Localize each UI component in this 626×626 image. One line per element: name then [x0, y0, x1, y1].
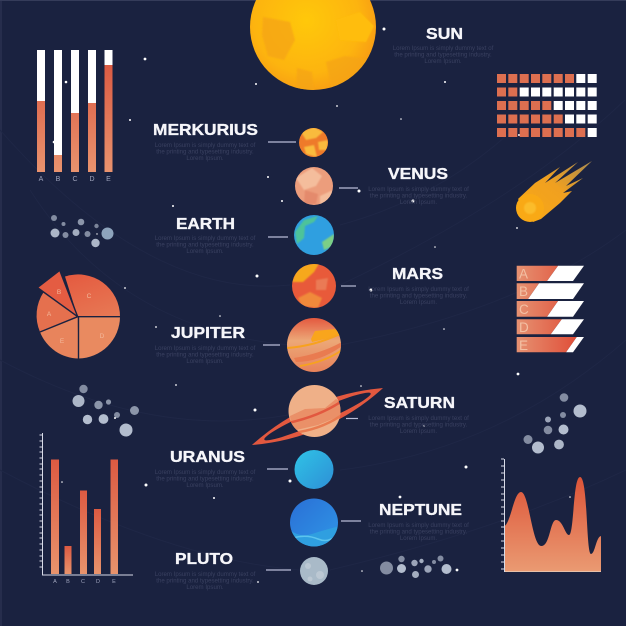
heading: merkurius: Lorem Ipsum.: [186, 155, 224, 162]
stacked bar chart: [37, 50, 112, 183]
planet: pluto: [300, 557, 328, 585]
ribbon chart: A to E: E: [519, 338, 528, 353]
ribbon chart: A to E: [517, 266, 584, 353]
heading: earth: EARTH: [176, 216, 235, 233]
heading: earth: Lorem Ipsum.: [186, 248, 224, 255]
heading: jupiter: Lorem Ipsum is simply dummy text of: [155, 345, 256, 352]
column chart: C: [81, 579, 85, 585]
waffle chart: [497, 74, 597, 137]
heading: uranus: the printing and typesetting industry.: [156, 476, 254, 482]
heading: neptune: Lorem Ipsum.: [400, 535, 437, 542]
pie chart: E: [60, 338, 65, 345]
column chart: E: [112, 579, 116, 585]
heading: mars: the printing and typesetting industry.: [370, 292, 468, 300]
heading: venus: Lorem Ipsum.: [400, 199, 437, 206]
heading: sun: Lorem Ipsum is simply dummy text of: [393, 45, 494, 52]
planet: saturn with ring: [252, 385, 383, 445]
heading: pluto: the printing and typesetting industry.: [156, 578, 254, 584]
heading: sun: Lorem Ipsum.: [424, 58, 462, 65]
stacked bar chart: C: [72, 176, 78, 183]
heading: jupiter: [155, 325, 256, 365]
heading: uranus: Lorem Ipsum is simply dummy text of: [155, 469, 256, 476]
heading: saturn: Lorem Ipsum is simply dummy text of: [368, 415, 469, 422]
planet: merkurius: [299, 127, 328, 157]
planet: sun: [250, 0, 376, 92]
heading: venus: Lorem Ipsum is simply dummy text of: [368, 186, 469, 193]
heading: earth: the printing and typesetting industry.: [156, 242, 254, 248]
heading: uranus: Lorem Ipsum.: [186, 482, 224, 489]
stars: [53, 28, 571, 583]
planet: neptune: [290, 498, 340, 548]
planet: jupiter: [287, 318, 342, 372]
heading: venus: VENUS: [388, 166, 448, 183]
heading: mars: Lorem Ipsum.: [400, 299, 437, 306]
column chart: [40, 433, 133, 585]
pie chart: B: [57, 289, 61, 296]
planet: uranus: [294, 450, 334, 489]
heading: jupiter: the printing and typesetting industry.: [156, 352, 254, 358]
pie chart: D: [100, 333, 105, 340]
ribbon chart: A to E: B: [519, 284, 528, 299]
heading: neptune: NEPTUNE: [379, 502, 462, 519]
planet: earth: [294, 215, 334, 256]
pie chart: [37, 271, 120, 358]
stacked bar chart: A: [39, 176, 44, 183]
area chart: [501, 459, 601, 572]
heading: mars: Lorem Ipsum is simply dummy text of: [368, 286, 469, 293]
stacked bar chart: B: [56, 176, 61, 183]
heading: merkurius: Lorem Ipsum is simply dummy text of: [155, 142, 256, 149]
heading: venus: the printing and typesetting industry.: [370, 192, 468, 200]
heading: saturn: the printing and typesetting industry.: [370, 422, 468, 428]
heading: sun: the printing and typesetting industry.: [394, 52, 492, 58]
heading: merkurius: [153, 122, 258, 162]
asteroid cluster: middle left: [72, 385, 139, 436]
asteroid cluster: right: [524, 393, 586, 454]
stacked bar chart: E: [106, 176, 111, 183]
heading: neptune: [368, 502, 469, 542]
heading: pluto: [155, 551, 256, 591]
ribbon chart: A to E: C: [519, 302, 529, 317]
heading: pluto: Lorem Ipsum.: [186, 584, 224, 591]
heading: earth: [155, 216, 256, 255]
heading: earth: Lorem Ipsum is simply dummy text of: [155, 235, 256, 242]
icon: comet: [516, 161, 592, 222]
heading: merkurius: MERKURIUS: [153, 122, 258, 139]
heading: sun: [393, 26, 494, 65]
heading: jupiter: JUPITER: [171, 325, 245, 342]
column chart: B: [66, 579, 70, 585]
asteroid cluster: upper left: [50, 215, 114, 247]
heading: neptune: Lorem Ipsum is simply dummy text of: [368, 522, 469, 529]
heading: sun: SUN: [426, 26, 463, 43]
planet: venus: [295, 167, 333, 205]
heading: mars: MARS: [392, 266, 443, 283]
heading: saturn: Lorem Ipsum.: [400, 428, 437, 435]
pie chart: A: [47, 311, 52, 318]
faint orbit lines: [0, 80, 626, 570]
heading: neptune: the printing and typesetting industry.: [370, 528, 468, 536]
heading: uranus: URANUS: [170, 449, 245, 466]
heading: saturn: [368, 395, 469, 435]
heading: merkurius: the printing and typesetting industry.: [156, 148, 254, 156]
column chart: A: [53, 579, 57, 585]
heading: mars: [368, 266, 469, 306]
heading: venus: [368, 166, 469, 206]
ribbon chart: A to E: A: [519, 266, 528, 282]
heading: saturn: SATURN: [384, 395, 455, 412]
pie chart: C: [87, 293, 92, 300]
asteroid cluster: bottom: [380, 556, 452, 578]
heading: jupiter: Lorem Ipsum.: [186, 358, 224, 365]
planet: mars: [292, 262, 336, 308]
column chart: D: [96, 579, 100, 585]
stacked bar chart: D: [89, 176, 95, 183]
heading: uranus: [155, 449, 256, 489]
heading: pluto: PLUTO: [175, 551, 233, 568]
ribbon chart: A to E: D: [519, 320, 529, 335]
heading: pluto: Lorem Ipsum is simply dummy text of: [155, 571, 256, 578]
